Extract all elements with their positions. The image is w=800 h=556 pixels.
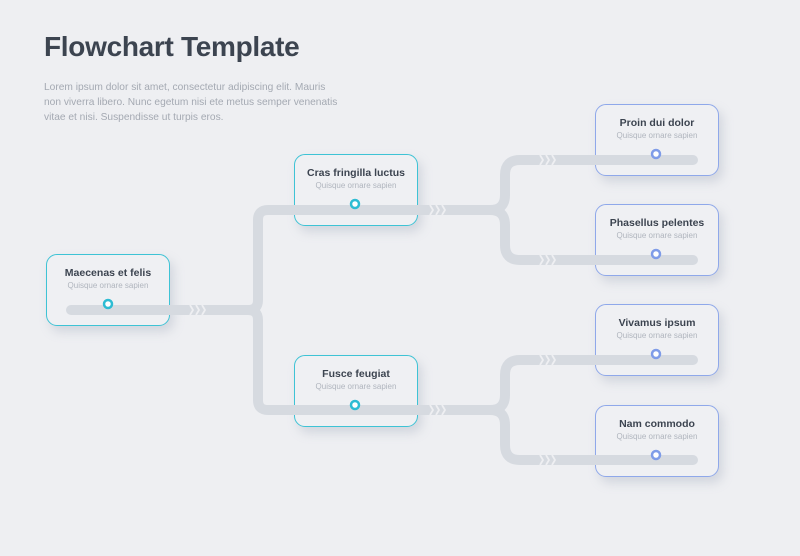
- box: Phasellus pelentes: Phasellus pelentes: [610, 217, 704, 229]
- box: Nam commodo: Nam commodo: [619, 418, 695, 430]
- box: Cras fringilla luctus: Cras fringilla luctus: [307, 167, 405, 179]
- box: Proin dui dolor: Proin dui dolor: [620, 117, 694, 129]
- box: Nam commodo: [595, 405, 719, 477]
- box: Phasellus pelentes: Quisque ornare sapien: [617, 231, 697, 240]
- intro paragraph: non viverra libero. Nunc egetum nisi ete metus semper venenatis: [44, 97, 337, 108]
- intro paragraph: Lorem ipsum dolor sit amet, consectetur adipiscing elit. Mauris: [44, 82, 325, 93]
- box: Maecenas et felis: Maecenas et felis: [65, 267, 151, 279]
- title: Flowchart Template: [44, 31, 299, 62]
- box: Fusce feugiat: [294, 355, 418, 427]
- box: Vivamus ipsum: Quisque ornare sapien: [617, 331, 697, 340]
- box: Cras fringilla luctus: [294, 154, 418, 226]
- box: Fusce feugiat: Fusce feugiat: [322, 368, 390, 380]
- box: Fusce feugiat: Quisque ornare sapien: [316, 382, 396, 391]
- box: Proin dui dolor: Quisque ornare sapien: [617, 131, 697, 140]
- box: Vivamus ipsum: [595, 304, 719, 376]
- intro paragraph: [44, 82, 337, 123]
- box: Nam commodo: Quisque ornare sapien: [617, 432, 697, 441]
- box: Proin dui dolor: [595, 104, 719, 176]
- dots: [104, 150, 660, 459]
- intro paragraph: vitae et nisi. Suspendisse ut turpis eros.: [44, 112, 224, 123]
- box: Maecenas et felis: [46, 254, 170, 326]
- box: Phasellus pelentes: [595, 204, 719, 276]
- box: Maecenas et felis: Quisque ornare sapien: [68, 281, 148, 290]
- box: Cras fringilla luctus: Quisque ornare sapien: [316, 181, 396, 190]
- box: Vivamus ipsum: Vivamus ipsum: [619, 317, 695, 329]
